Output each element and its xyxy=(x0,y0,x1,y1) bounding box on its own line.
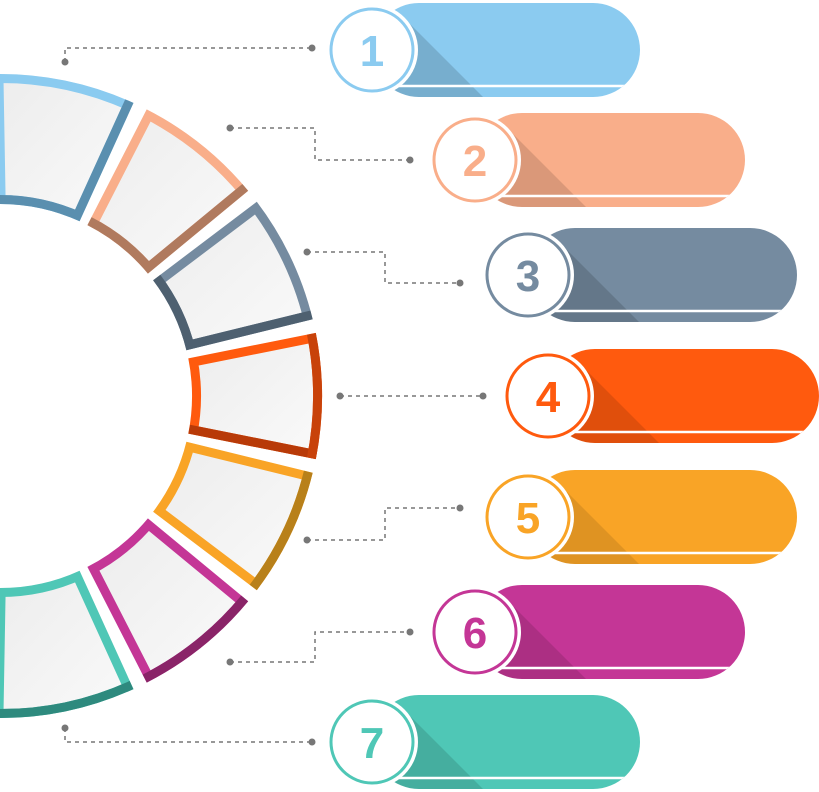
pill 5 xyxy=(486,470,797,564)
segment 2 xyxy=(87,109,248,274)
segment 7 xyxy=(0,571,134,718)
pill 2: 2 xyxy=(463,137,487,186)
pill 3 xyxy=(486,228,797,322)
pill 1 xyxy=(330,3,640,97)
pill 6: 6 xyxy=(463,609,487,658)
pill 4 xyxy=(506,349,819,443)
pill 3: 3 xyxy=(516,252,540,301)
pill 7 xyxy=(330,695,640,789)
pill 4: 4 xyxy=(536,373,561,422)
pill 7: 7 xyxy=(360,719,384,768)
segment 6 xyxy=(87,518,248,683)
connectors xyxy=(65,48,483,742)
segment 4 xyxy=(188,333,322,459)
pill 1: 1 xyxy=(360,27,384,76)
pill 5: 5 xyxy=(516,494,540,543)
pill 6 xyxy=(432,585,745,679)
segment 1 xyxy=(0,74,134,221)
segment 3 xyxy=(153,202,313,350)
segment 5 xyxy=(153,442,313,590)
pill 2 xyxy=(432,113,745,207)
